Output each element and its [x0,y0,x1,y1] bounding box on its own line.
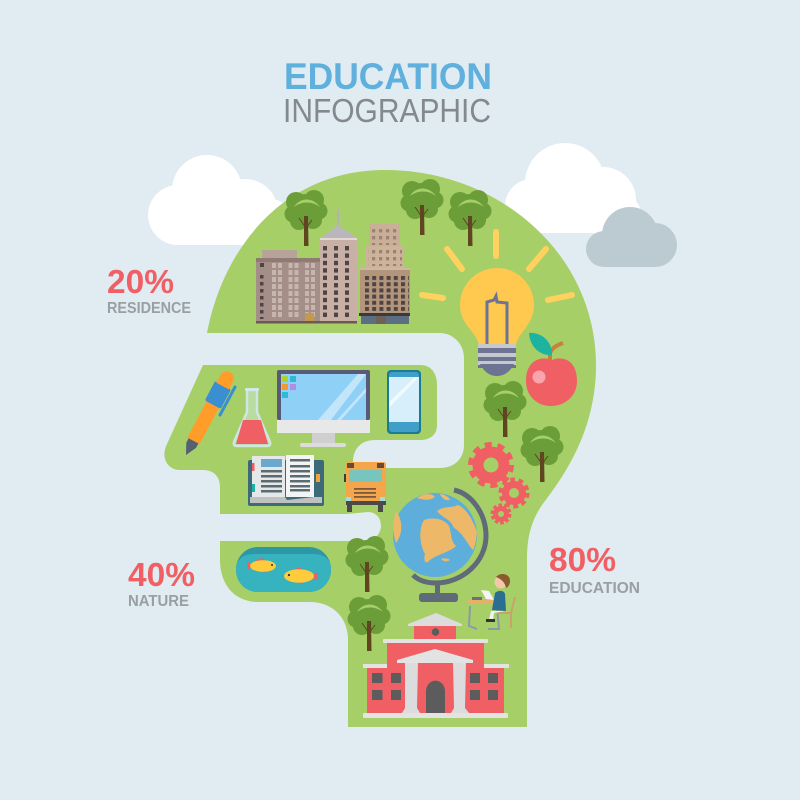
small gear [492,506,510,522]
stat: residence: 20% [107,263,174,300]
fish 1 [247,558,276,573]
light bulb [422,232,572,376]
tree 1 [284,190,328,246]
cloud: right white [505,143,641,233]
globe [393,490,486,602]
stat: nature: 40% [128,556,195,593]
school bus [344,462,386,512]
tree 7 [348,595,390,651]
cloud: grey [586,207,677,267]
tree 2 [400,179,444,235]
title: INFOGRAPHIC [283,92,491,129]
stat: residence: RESIDENCE [107,300,191,317]
central tower [320,210,357,324]
stat: nature [128,556,195,610]
pond with fish [236,547,331,592]
tree 6 [346,536,388,592]
tree 4 [484,381,526,437]
stat: nature: NATURE [128,593,189,610]
phone [387,370,421,434]
title: EDUCATION [284,56,492,97]
head silhouette [164,170,596,727]
stat: education [549,541,640,597]
large gear [471,445,511,485]
stat: education: 80% [549,541,616,578]
school building [363,613,509,718]
stat: education: EDUCATION [549,580,640,597]
fish 2 [284,567,318,584]
right building [359,224,410,324]
medium gear [501,480,527,506]
tree 3 [448,190,492,246]
tree 5 [520,426,564,482]
flask [234,388,270,446]
title [283,56,492,129]
student at desk [468,574,515,629]
apple [526,333,577,406]
gears [471,445,527,522]
rays [422,232,572,300]
book [248,455,324,506]
city buildings [256,210,410,324]
cloud: left white [148,155,293,245]
monitor [277,370,370,447]
left building [256,250,321,324]
stat: residence [107,263,191,317]
pen [178,368,238,459]
